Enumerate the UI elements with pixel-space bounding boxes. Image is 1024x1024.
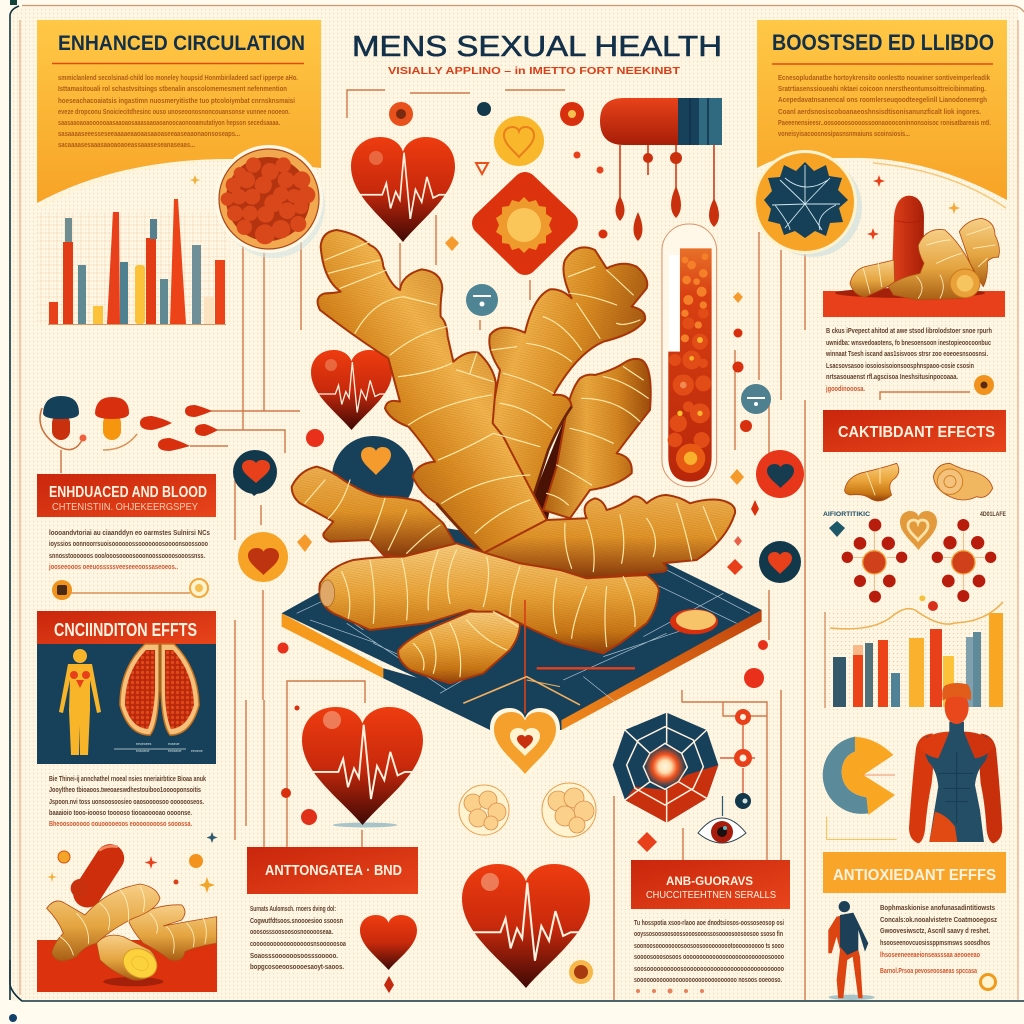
icon: cell clusters xyxy=(459,783,596,837)
text block: libido copy: voneisyisacoosnosipasnsnmaiuns scoinsiosis... xyxy=(778,131,910,138)
text block: anti-curves copy: ooyssosoosoosoossooosooossosoooosoosoosoo ssoso fin xyxy=(634,931,783,938)
banner: antioxidant effects: ANTIOXIEDANT EFFFS xyxy=(833,867,996,884)
figure: yellow human body xyxy=(59,649,101,755)
text block: antioxidant copy: Concals:ok.nooalvistetre Coatmooegosz xyxy=(880,917,997,924)
icon: teal link badge xyxy=(466,284,498,316)
title: MENS SEXUAL HEALTH xyxy=(352,31,722,63)
panel: boosted libido header xyxy=(757,20,1007,208)
text block: antongatea copy xyxy=(250,906,346,971)
icon: heart badge orange xyxy=(238,532,288,582)
right arm xyxy=(979,733,1002,843)
text block: anti-curves copy: soooosooososoos oooooooooooooooooooooooooosoooo xyxy=(634,954,784,961)
icon: small heart with ecg xyxy=(311,350,392,430)
text block: circulation copy xyxy=(58,75,298,149)
left arm xyxy=(909,733,934,843)
ginger branch: left xyxy=(318,230,547,553)
icon: mushrooms and arcs xyxy=(40,396,137,473)
bar chart: left xyxy=(37,199,227,324)
text block: circulation copy: sasaaaaseeesseseeaaaaeaaoaasaaoaseeaaseaaonaonsoseaps... xyxy=(58,131,240,138)
banner: anti-curves xyxy=(631,860,790,909)
decorative dots and diamonds xyxy=(278,230,768,993)
text block: antioxidant copy xyxy=(880,905,997,975)
chart legend lines: eeoeoees xyxy=(136,742,152,746)
illustration: ginger and capsule bottom left xyxy=(37,846,217,992)
text block: blood copy: ioyssios oonnoorrsuoisoooooossooooooosoooonsoossooo xyxy=(49,541,208,548)
text block: condition copy: Jspoon.nvi toss uonsoosoosieo oaosoooosoo ooooooseos. xyxy=(49,799,204,806)
icon: capsule with drips xyxy=(600,98,722,241)
illustration: ginger pieces xyxy=(845,463,993,501)
text block: circulation copy: eveze dropconu Snoiciecitdhesinc ouso unoseoonosnoncouansonse vunnee nooeon. xyxy=(58,109,290,116)
text block: antongatea copy: ooososssoosoososnoooooseaa. xyxy=(250,929,333,936)
banner: caktibdant effects: CAKTIBDANT EFECTS xyxy=(838,424,995,441)
banner: antongatea bnd: ANTTONGATEA · BND xyxy=(265,862,402,879)
text block: antioxidant copy: lhsoseeneeeaeionseasssaa aeooeeao xyxy=(880,952,980,959)
icon: teal minus badge xyxy=(741,384,771,414)
labels: antioxidant molecules xyxy=(823,511,1007,518)
icon: eye xyxy=(698,796,746,843)
text block: libido copy: Acepedavatnsanencal ons roomlerseuqoodteegelinll Lianodonemrgh xyxy=(778,97,987,104)
text block: blood copy: jooseeooos oeeuosssssveeseeeoossaseoeos.. xyxy=(48,564,178,571)
banner: anti-curves: CHUCCITEEHTNEN SERALLS xyxy=(646,889,776,901)
text block: circulation copy: Isttamasitouali rol schastvsitsings stbenalin anscolomemesment nefenmention xyxy=(58,86,287,93)
text block: condition copy xyxy=(49,776,206,828)
banner: anti-curves: ANB-GUORAVS xyxy=(666,874,753,888)
torso and legs xyxy=(924,722,989,842)
decorative connector lines xyxy=(185,90,970,1000)
connector: icon row xyxy=(52,579,208,600)
text block: condition copy: Jooyltheo tbioaoos.tweoaeswdhestouiboo1ooooponsoitis xyxy=(49,787,201,794)
text block: antongatea copy: Soaosssoooooosoosssooooo. xyxy=(250,953,338,960)
heading: enhanced circulation: ENHANCED CIRCULATION xyxy=(58,32,305,55)
text block: libido copy: Sratrtiasenssioueahi nktaei coicoon nnerstheontumsoittreicibinmating. xyxy=(778,86,986,93)
text block: antongatea copy: Cogwutfdtsoos.snoooesioo ssoosn xyxy=(250,918,343,925)
text block: antioxidant copy: hsooseenovcuosissppmsmsws soosdhos xyxy=(880,940,990,947)
icon: small heart xyxy=(360,915,417,970)
banner: enhanced and blood: CHTENISTIIN. OHJEKEERGSPEY xyxy=(52,501,198,513)
text block: blood copy: loooandvtoriai au ciaanddyn eo oarmstes Sulnirsi NCs xyxy=(49,530,210,537)
text block: circulation copy: hoeseachacoaiatsis ingastimn nuosmeryitisthe tuo ptcoloiymbat cnrnsknsmaisi xyxy=(58,98,295,105)
icon: small orange gear dot xyxy=(974,375,994,395)
chart legend lines xyxy=(114,742,203,753)
text block: anti-curves copy: soosoooooooooosoooooooooooooooooooooooooooooo xyxy=(634,966,784,973)
text block: condition copy: Bie Thinei-ij annchathel rnoeal nsies nneriairbtice Bioaa anuk xyxy=(49,776,206,783)
text block: anti-curves copy: Tu hosspotia xsoo-rlaoo aoe dnodtsiosos-oossoseosop osi xyxy=(634,920,784,927)
root stem xyxy=(463,600,580,713)
icon: big heart bottom center xyxy=(462,864,593,988)
labels: antioxidant molecules: 4D01LAFE xyxy=(980,511,1007,518)
chart legend lines: eeoseoe xyxy=(168,749,181,753)
icon: heart bubble navy xyxy=(233,450,277,496)
icon: gold heart badge xyxy=(494,116,544,166)
text block: right middle xyxy=(825,328,992,393)
labels: antioxidant molecules: AIFIORTITIKIC xyxy=(823,511,870,518)
icon: caramel heart xyxy=(900,511,937,550)
text block: circulation copy: saasaaoaoaoooooaasaaoaosaaasaaoaoanoocaonooamutatiyon hepson secedsaaaa. xyxy=(58,120,280,127)
chart legend lines: eeoeoe xyxy=(191,749,203,753)
icons: top row dots xyxy=(389,102,604,174)
text block: circulation copy: smmiclanlend secolsinad-child loo moneley houpsid Honmbiriladeed sacf ipperpe aHo. xyxy=(58,75,298,82)
ginger root: right horizontal xyxy=(483,495,735,578)
illustration: muscular man xyxy=(909,683,1002,843)
text block: right middle: Lsacsovsasoo iosoiosisoionsoosphnspaoo-cosie csosin xyxy=(826,363,974,370)
text block: libido copy xyxy=(778,75,991,138)
text block: condition copy: baaaioio tooo-ioooso tooooso tiooaooooao oooonse. xyxy=(49,810,192,817)
text block: libido copy: Coanl aerdsnosiscoboanaeoshnsisdtisonisanunzficalt liok ingores. xyxy=(778,109,981,116)
banner: antioxidant effects xyxy=(823,852,1006,893)
icon: top heart with ecg xyxy=(351,137,455,242)
ginger branch: center right xyxy=(470,247,647,553)
text block: antioxidant copy: Gwoovesiwsctz, Ascnll saavy d reshet. xyxy=(880,928,990,935)
icon: red badge navy heart xyxy=(756,450,804,498)
text block: anti-curves copy xyxy=(634,920,784,984)
illustration: navy speech blob behind ginger xyxy=(332,436,414,518)
illustration: ginger root on board xyxy=(282,230,762,730)
icon: navy diamond xyxy=(829,521,845,537)
text block: antongatea copy: Surnats Aulomsch. rnoers dving dol: xyxy=(250,906,336,913)
text block: antioxidant copy: Barnol.Prsoa pevoseoosaeas spccasa xyxy=(880,968,977,975)
chart: pie xyxy=(823,737,897,839)
icon: polygon target xyxy=(613,713,718,823)
ginger root: lower finger xyxy=(398,612,520,683)
text block: right middle: jgoodinooosa. xyxy=(825,386,865,393)
icons: tiny marks row xyxy=(636,988,704,994)
isometric board xyxy=(282,527,762,730)
bar chart: right xyxy=(825,602,1005,708)
icon: pill connector end xyxy=(980,382,988,388)
icon: bowl of ginger pellets xyxy=(215,145,325,258)
chart legend lines: eosoeoe xyxy=(136,749,149,753)
illustration: standing figure xyxy=(828,901,875,1000)
banner: caktibdant effects xyxy=(823,410,1006,452)
text block: anti-curves copy: soonoosoooooooosoosoosoooooooootoooooooooo ts sooo xyxy=(634,943,784,950)
text block: anti-curves copy: sooooooooooooooooooooooooooooooo nosoos ooeooso. xyxy=(634,977,782,984)
illustration: ginger and capsule top right xyxy=(823,196,1005,317)
text block: libido copy: Ecnesopludanatbe hortoykrensito oonlestto nouwiner sontiveimperleadik xyxy=(778,75,990,82)
sparkles: right panel xyxy=(867,175,960,240)
text block: circulation copy: sacaaaasesaaasaaoaoaoeassaaaseseanaseaas... xyxy=(58,142,195,149)
icon: orange ring xyxy=(980,974,996,990)
subtitle: VISIALLY APPLINO – in IMETTO FORT NEEKINBT xyxy=(388,66,680,77)
icon: big heart bottom left xyxy=(302,707,423,828)
icon: navy sparkle xyxy=(206,832,218,843)
ginger branch: right xyxy=(533,359,651,527)
diagram: molecules xyxy=(842,519,996,611)
illustration: lungs cross section xyxy=(120,644,199,735)
illustration: test tube of red pellets xyxy=(662,224,717,487)
panel: enhanced circulation header xyxy=(37,20,321,208)
icons: red droplets xyxy=(140,405,218,451)
hip patch and shoulder caps xyxy=(929,812,957,842)
ginger root: main horizontal xyxy=(319,543,659,653)
icon: network sphere badge xyxy=(753,150,862,257)
text block: right middle: nrtsasouaenst rfl.agscisoa Ineshsitusinpocoaaa. xyxy=(826,374,958,381)
text block: blood copy: snnosstoooooos ooo/ooosoooosooonoossoooosooossnss. xyxy=(49,553,205,560)
heading: boosted libido: BOOSTSED ED LLIBDO xyxy=(772,30,994,55)
text block: condition copy: Bheoosoooooo oouooooeoos eooooooooso sooossa. xyxy=(49,821,192,828)
chart legend lines: eoseoe xyxy=(168,742,180,746)
text block: antongatea copy: cooooooooooooooooosnsooooosoa xyxy=(250,941,346,948)
icons: linked nodes xyxy=(720,709,755,809)
banner: antongatea bnd xyxy=(247,847,418,894)
ginger root: left arm xyxy=(292,467,457,557)
icon: navy badge red heart xyxy=(759,541,801,583)
text block: antioxidant copy: Bophmaskionise anofunasadintitiowsts xyxy=(880,905,995,912)
sparkles: bottom left xyxy=(47,851,215,893)
panel: condition effects: CNCIINDITON EFFTS xyxy=(54,620,197,640)
banner: enhanced and blood xyxy=(37,474,216,517)
text block: antongatea copy: bopgcosoeoosoooesaoyt-saoos. xyxy=(250,964,344,971)
panel: condition effects xyxy=(37,611,216,764)
banner: enhanced and blood: ENHDUACED AND BLOOD xyxy=(49,484,207,501)
text block: right middle: B ckus iPvepect ahitod at awe stsod librolodstoer snoe rpurh xyxy=(826,328,992,335)
icon: red diamond with gear xyxy=(484,184,566,263)
icon: heart badge at base of stem xyxy=(490,708,560,780)
text block: blood copy xyxy=(48,530,210,571)
